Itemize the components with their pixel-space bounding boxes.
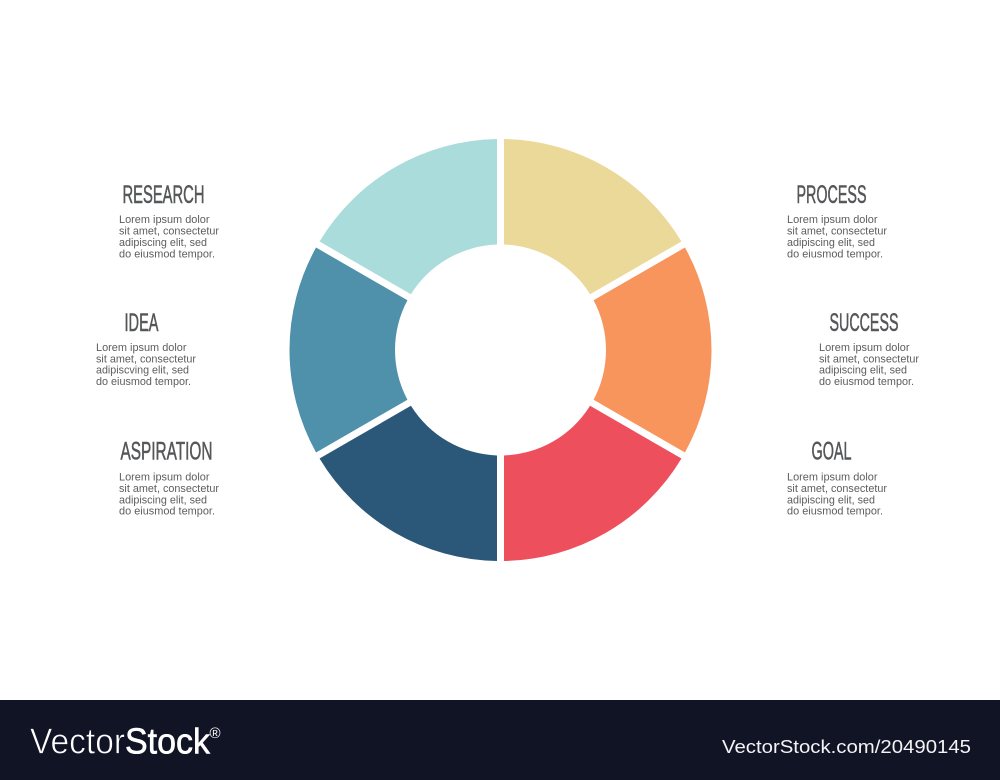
- heading: idea: IDEA: [124, 309, 159, 337]
- body: success: [819, 342, 919, 388]
- segment: aspiration (navy): [320, 406, 497, 561]
- text block: aspiration: [119, 438, 219, 518]
- footer logo: ®: [210, 725, 221, 742]
- body: goal: Lorem ipsum dolor: [787, 472, 878, 484]
- body: aspiration: [119, 472, 219, 518]
- text block: idea: [96, 309, 196, 388]
- body: process: adipiscing elit, sed: [787, 237, 875, 249]
- body: research: adipiscing elit, sed: [119, 237, 207, 249]
- text block: goal: [787, 438, 887, 518]
- body: idea: do eiusmod tempor.: [96, 376, 191, 388]
- footer logo: Vector: [30, 720, 125, 762]
- body: success: Lorem ipsum dolor: [819, 342, 910, 354]
- body: research: Lorem ipsum dolor: [119, 214, 210, 226]
- text block: process: [787, 181, 887, 260]
- heading: process: PROCESS: [796, 181, 866, 209]
- body: goal: do eiusmod tempor.: [787, 506, 883, 518]
- body: research: [119, 214, 219, 260]
- body: process: [787, 214, 887, 260]
- body: success: do eiusmod tempor.: [819, 376, 914, 388]
- donut chart: [290, 139, 711, 561]
- body: goal: sit amet, consectetur: [787, 483, 887, 495]
- body: process: do eiusmod tempor.: [787, 248, 883, 260]
- body: success: adipiscing elit, sed: [819, 364, 907, 376]
- body: aspiration: do eiusmod tempor.: [119, 506, 215, 518]
- footer logo: Stock: [125, 720, 211, 762]
- body: research: do eiusmod tempor.: [119, 248, 215, 260]
- text block: success: [819, 309, 919, 388]
- text block: research: [119, 181, 219, 260]
- body: idea: Lorem ipsum dolor: [96, 342, 187, 354]
- body: idea: [96, 342, 196, 388]
- footer image id: VectorStock.com/20490145: [722, 737, 971, 757]
- segment: idea (blue): [290, 248, 407, 452]
- body: aspiration: Lorem ipsum dolor: [119, 472, 210, 484]
- heading: research: RESEARCH: [122, 181, 204, 209]
- heading: goal: GOAL: [812, 438, 852, 466]
- body: idea: adipiscving elit, sed: [96, 364, 189, 376]
- heading: aspiration: ASPIRATION: [120, 438, 212, 466]
- heading: success: SUCCESS: [830, 309, 898, 337]
- body: process: Lorem ipsum dolor: [787, 214, 878, 226]
- footer bar: [0, 700, 1000, 780]
- body: success: sit amet, consectetur: [819, 354, 919, 366]
- body: research: sit amet, consectetur: [119, 226, 219, 238]
- segment: goal (red): [504, 406, 681, 561]
- segment: process (yellow): [504, 139, 681, 294]
- body: process: sit amet, consectetur: [787, 226, 887, 238]
- body: aspiration: adipiscing elit, sed: [119, 494, 207, 506]
- segment: research (teal): [320, 139, 497, 294]
- body: goal: [787, 472, 887, 518]
- footer logo: [30, 720, 221, 762]
- segment: success (orange): [594, 248, 711, 452]
- body: goal: adipiscing elit, sed: [787, 494, 875, 506]
- body: idea: sit amet, consectetur: [96, 354, 196, 366]
- body: aspiration: sit amet, consectetur: [119, 483, 219, 495]
